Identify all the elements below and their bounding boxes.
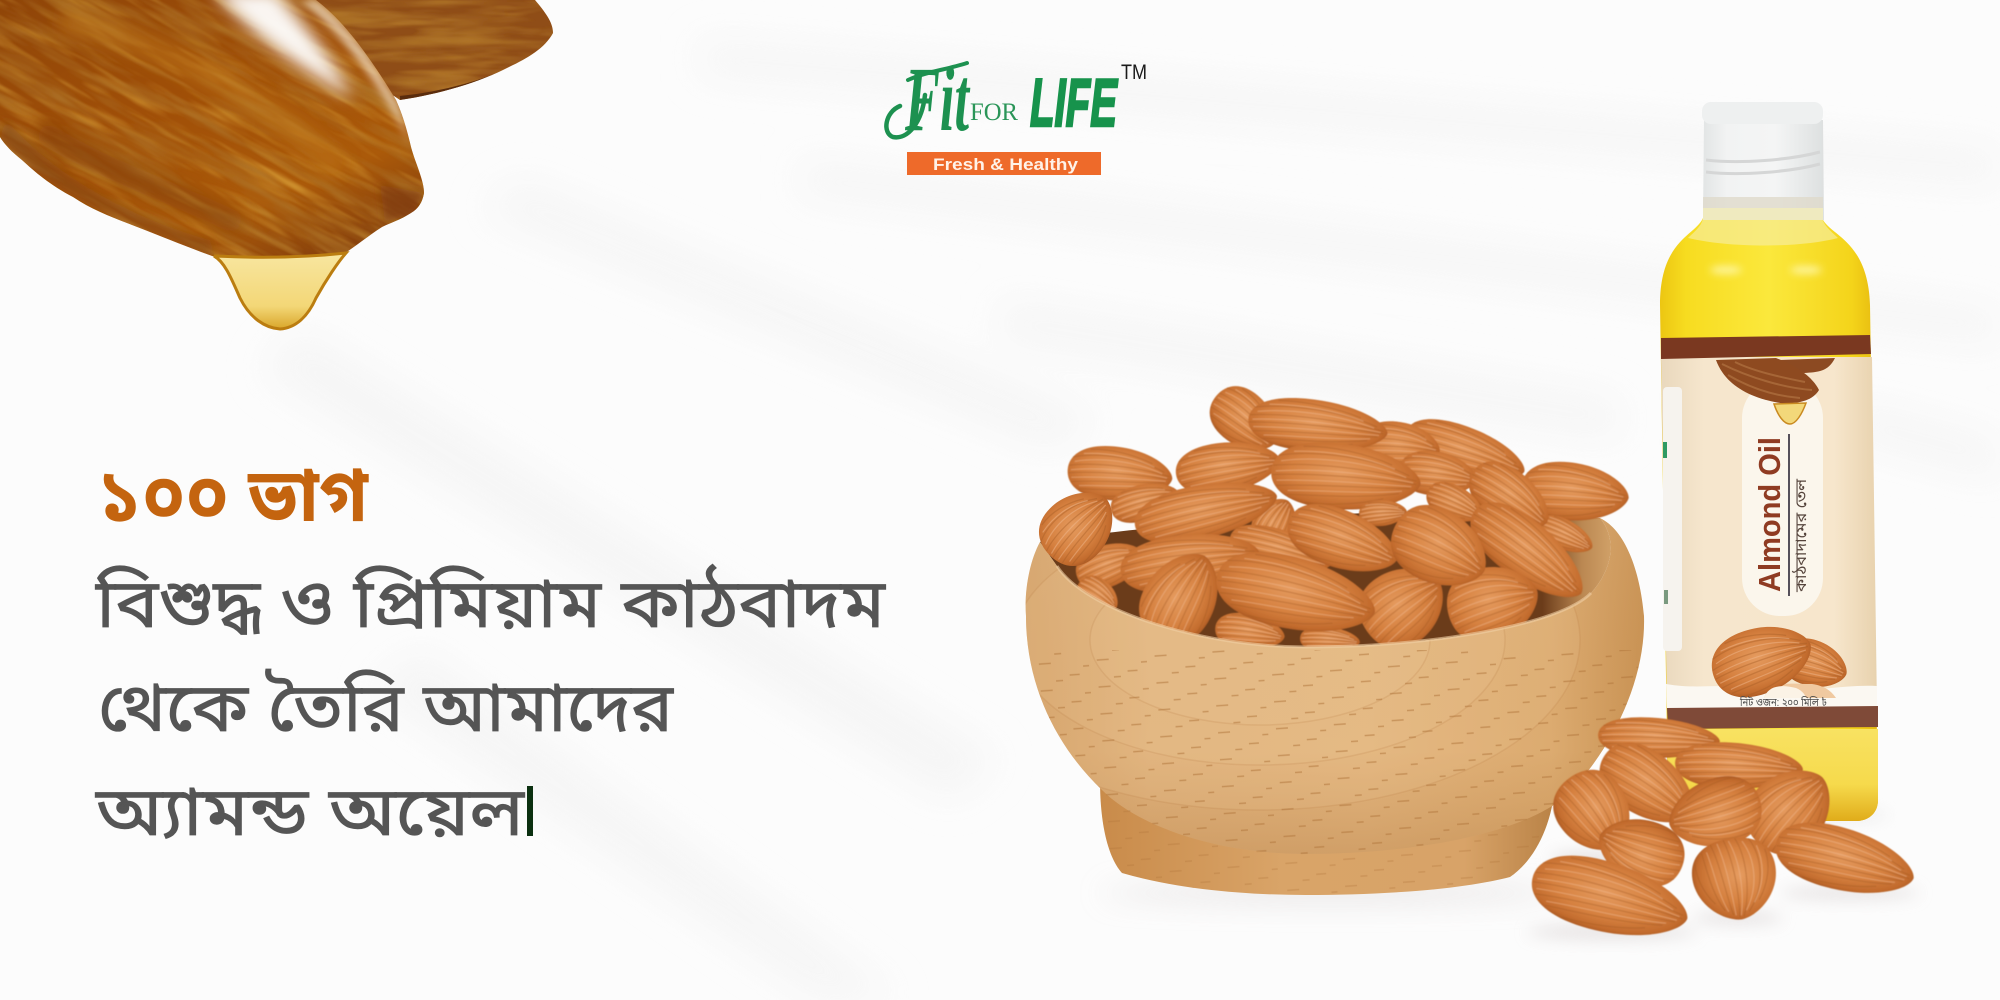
- full stop danda: [527, 786, 533, 836]
- almonds in bowl: [1065, 375, 1632, 662]
- label net weight: নিট ওজন: ২০০ মিলি ৳: [1739, 696, 1827, 709]
- bowl inside: [1040, 512, 1611, 647]
- body line 2: থেকে তৈরি আমাদের: [98, 670, 675, 746]
- almond pile: [1524, 715, 1922, 953]
- icon: oil drop: [214, 253, 346, 329]
- tagline banner: Fresh & Healthy: [933, 155, 1079, 174]
- label Bengali product name: কাঠবাদামের তেল: [1792, 478, 1810, 593]
- logo word FOR: FOR: [970, 99, 1018, 126]
- icon: glossy highlight on almond: [212, 0, 352, 98]
- label product name: Almond Oil: [1752, 437, 1787, 592]
- label upper almond: [1716, 358, 1835, 424]
- label oval panel: [1742, 380, 1823, 616]
- logo script word Fit: [886, 48, 970, 150]
- bowl foot: [1100, 780, 1555, 895]
- second almond behind, top left: [316, 0, 553, 100]
- headline text: [95, 454, 886, 850]
- bottle body: [1660, 218, 1878, 821]
- logo: [886, 48, 1147, 175]
- bowl shadow: [1100, 884, 1560, 902]
- bottle cap: [1702, 102, 1824, 220]
- loose almonds in front: [1524, 715, 1922, 953]
- body line 3: অ্যামন্ড অয়েল: [95, 774, 525, 850]
- body line 1: বিশুদ্ধ ও প্রিমিয়াম কাঠবাদম: [95, 565, 886, 642]
- label lower almonds: [1703, 613, 1853, 707]
- trademark: TM: [1121, 61, 1147, 84]
- almond shadows: [1527, 852, 1920, 939]
- large almond with oil, top left: [0, 0, 424, 256]
- tagline banner: [907, 152, 1101, 175]
- bottle soft shadow: [1710, 807, 1890, 823]
- logo word LIFE: LIFE: [1030, 65, 1119, 141]
- label side information panel: [1663, 387, 1682, 651]
- logo script word Fit: Fit: [904, 48, 970, 150]
- bowl of almonds: [940, 375, 1650, 902]
- label divider: [1788, 434, 1790, 596]
- almond over left rim: [1026, 475, 1130, 579]
- bottle: [1660, 102, 1890, 823]
- bowl front: [1026, 518, 1644, 854]
- highlight heading: ১০০ ভাগ: [98, 454, 369, 537]
- label: [1661, 335, 1878, 729]
